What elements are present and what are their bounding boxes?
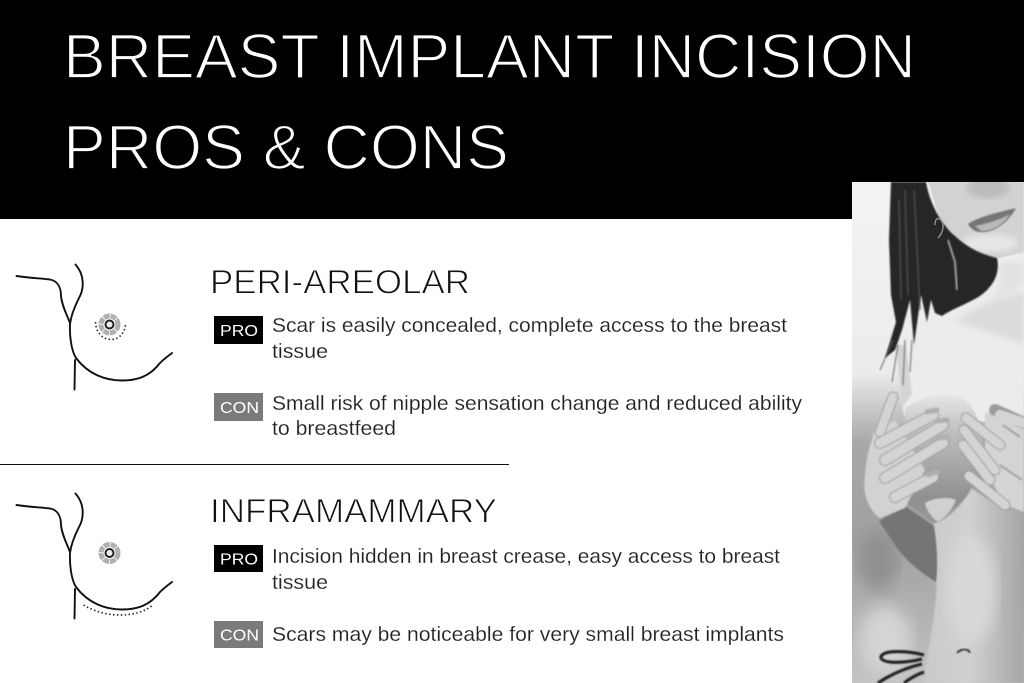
text: inframammary pro	[272, 545, 780, 594]
heading: peri-areolar: PERI-AREOLAR	[210, 264, 470, 302]
badge: con: CON	[220, 628, 259, 644]
text: peri-areolar pro: tissue	[272, 340, 328, 363]
text: peri-areolar con: to breastfeed	[272, 417, 396, 440]
text: inframammary pro: Incision hidden in breast crease, easy access to breast	[272, 545, 780, 568]
badge: con: CON	[220, 400, 259, 417]
heading: inframammary: INFRAMAMMARY	[210, 492, 497, 530]
left hand	[864, 397, 947, 518]
title	[63, 22, 916, 183]
text: peri-areolar pro: Scar is easily concealed, complete access to the breast	[272, 314, 787, 337]
text: peri-areolar pro	[272, 314, 787, 363]
photo: woman's torso	[852, 178, 1024, 683]
title: BREAST IMPLANT INCISION	[63, 22, 916, 92]
section: inframammary	[16, 492, 784, 648]
title: PROS & CONS	[63, 113, 509, 183]
badge: pro	[214, 545, 263, 572]
badge: con	[214, 393, 263, 421]
section: peri-areolar	[16, 264, 803, 440]
right hand	[963, 410, 1024, 512]
icon: breast diagram with inframammary incision	[16, 494, 172, 618]
icon: breast diagram with peri-areolar incision	[16, 264, 172, 390]
text: inframammary con: Scars may be noticeable for very small breast implants	[272, 623, 784, 646]
badge: pro: PRO	[220, 552, 258, 568]
black header band	[0, 0, 1024, 219]
text: peri-areolar con	[272, 392, 803, 440]
badge: con	[214, 621, 263, 648]
badge: pro	[214, 316, 263, 344]
text: peri-areolar con: Small risk of nipple sensation change and reduced ability	[272, 392, 803, 415]
badge: pro: PRO	[220, 323, 258, 340]
text: inframammary pro: tissue	[272, 571, 328, 594]
